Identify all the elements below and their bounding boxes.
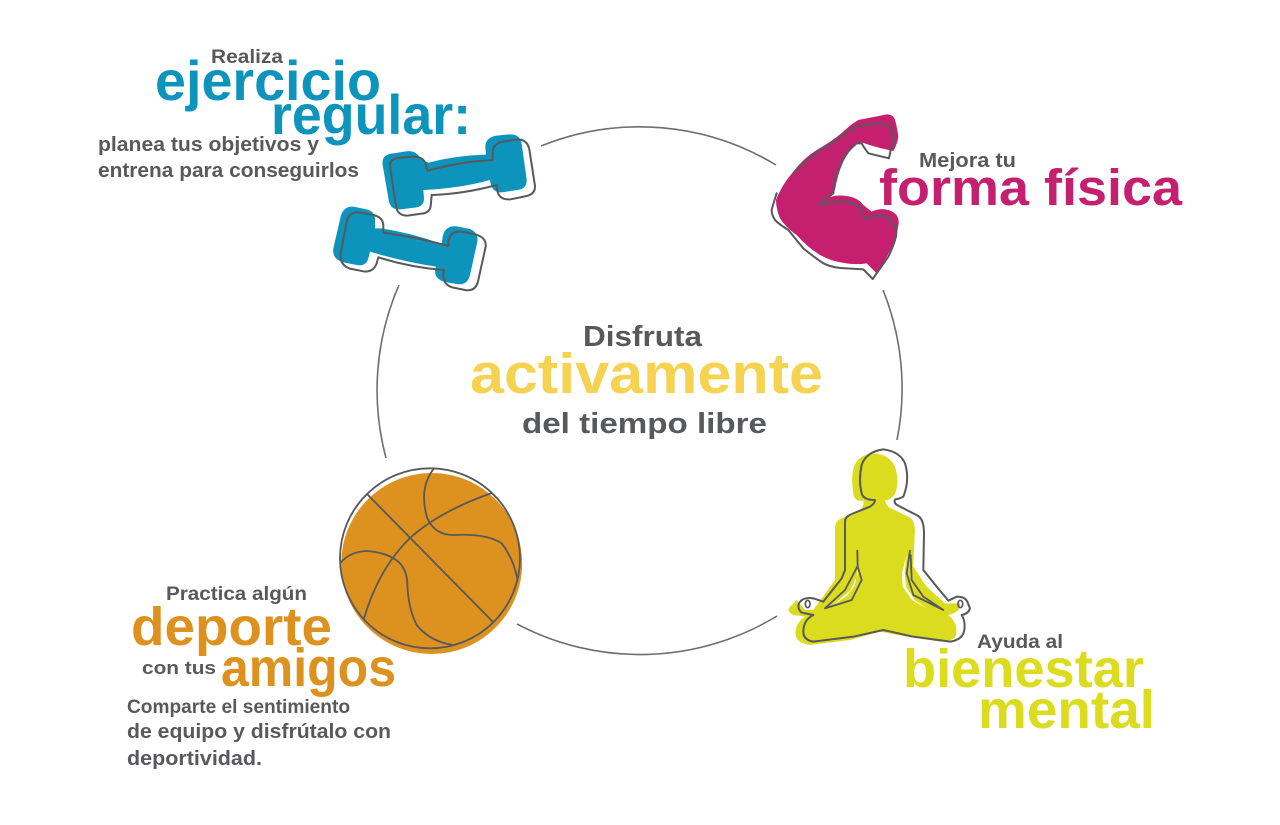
icon: basketball <box>340 468 522 654</box>
central ring of four arcs <box>377 127 902 655</box>
central title: del tiempo libre <box>522 408 767 440</box>
icon: dumbbells <box>333 134 535 290</box>
icon: flexed arm <box>772 114 899 279</box>
panel: deporte amigos: con tus <box>142 658 216 678</box>
panel: deporte amigos: deportividad. <box>127 748 262 770</box>
panel: bienestar mental: mental <box>978 680 1155 740</box>
panel: ejercicio regular: regular: <box>271 83 471 146</box>
panel: deporte amigos: de equipo y disfrútalo con <box>127 721 391 743</box>
central title <box>470 321 823 440</box>
panel: deporte amigos: Practica algún <box>166 584 307 605</box>
panel: bienestar mental: Ayuda al <box>977 632 1063 653</box>
panel: bienestar mental <box>903 632 1155 740</box>
central title: Disfruta <box>583 321 703 353</box>
panel: bienestar mental: bienestar <box>903 639 1144 699</box>
panel: ejercicio regular: entrena para conseguirlos <box>98 160 359 182</box>
icon: meditating figure <box>789 449 970 645</box>
panel: ejercicio regular: planea tus objetivos y <box>98 134 320 156</box>
panel: deporte amigos: Comparte el sentimiento <box>127 696 350 718</box>
panel: forma fisica: Mejora tu <box>919 150 1016 172</box>
panel: deporte amigos <box>127 584 396 770</box>
panel: ejercicio regular <box>98 47 471 182</box>
central title: activamente <box>470 342 823 406</box>
panel: ejercicio regular: ejercicio <box>155 49 381 112</box>
panel: ejercicio regular: Realiza <box>211 47 283 68</box>
panel: forma fisica: forma física <box>879 159 1183 216</box>
panel: deporte amigos: deporte <box>131 597 332 657</box>
panel: deporte amigos: amigos <box>221 638 396 698</box>
